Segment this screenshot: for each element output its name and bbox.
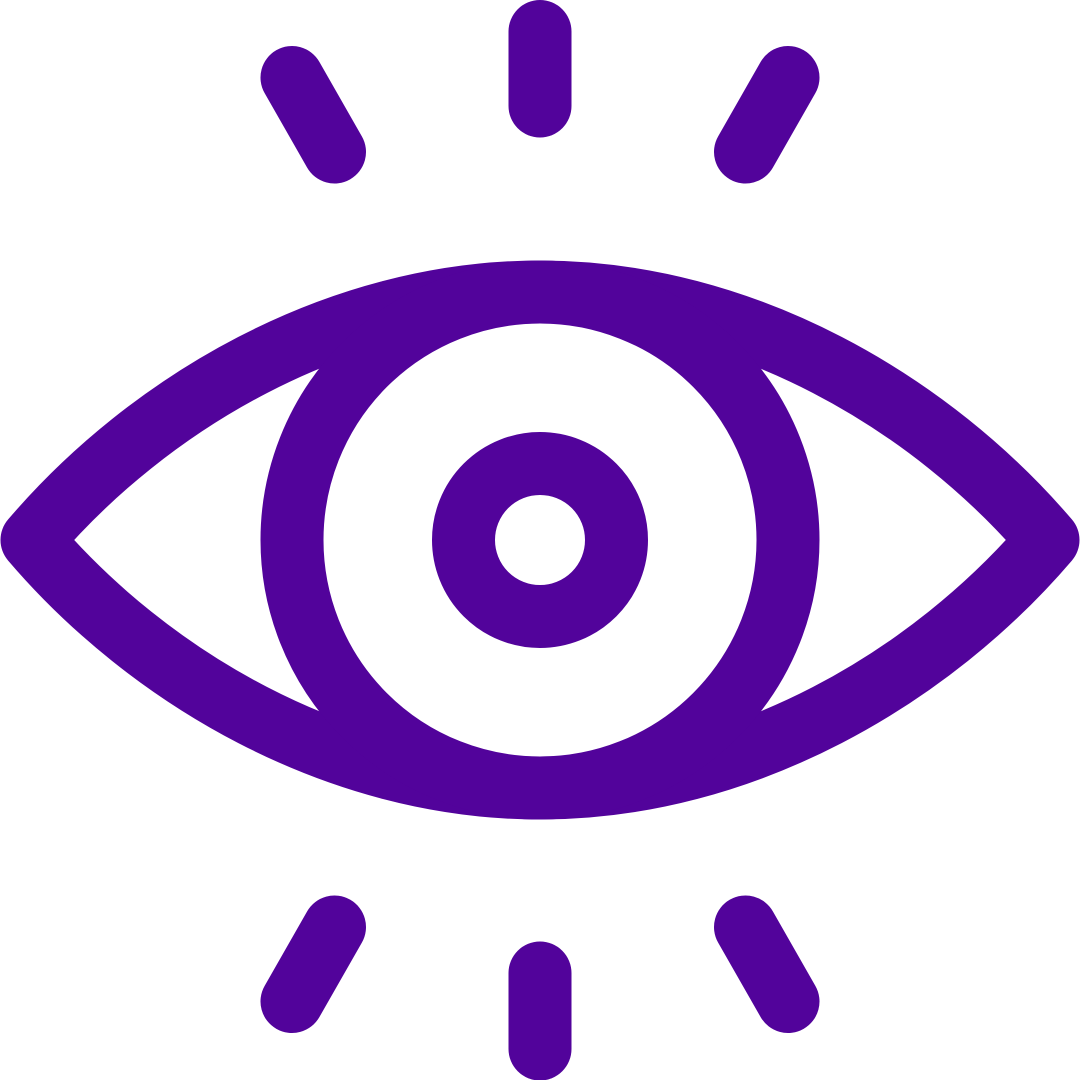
- top rays: [292, 32, 788, 152]
- pupil ring: [464, 464, 616, 616]
- bottom rays: [292, 927, 788, 1049]
- eye outline: [32, 292, 1048, 788]
- iris ring: [292, 292, 788, 788]
